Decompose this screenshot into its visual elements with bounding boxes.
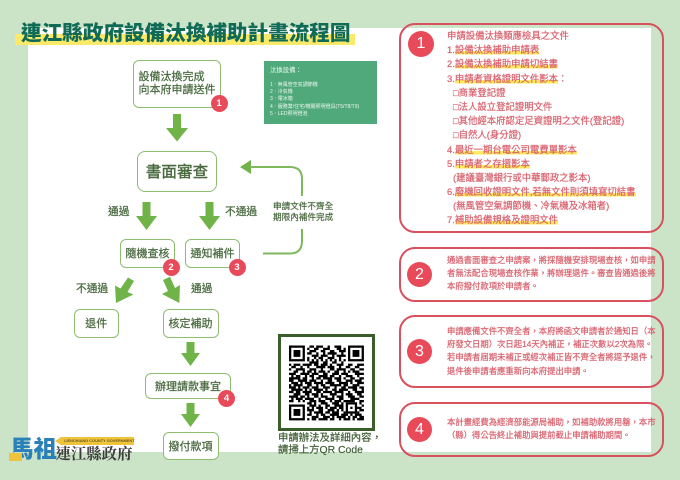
panel 1: required documents [399, 23, 664, 233]
equipment list [270, 82, 359, 117]
documents list: 申請設備汰換類應檢具之文件 [447, 30, 569, 41]
equipment list: 4．服務業/住宅/機關照明燈具(T5/T8/T9) [270, 104, 359, 110]
resubmission text: 府發文日期）次日起14天內補正，補正次數以2次為限。 [447, 339, 653, 349]
resubmission text: 退件後申請者應重新向本府提出申請。 [447, 366, 589, 376]
step: return: 退件 [85, 318, 107, 330]
step: notify: 通知補件 [190, 248, 234, 260]
step: submit application: 向本府申請送件 [138, 84, 216, 96]
logo name: 連江縣政府 [56, 446, 132, 463]
logo yellow accent [9, 453, 22, 461]
title highlight [15, 34, 355, 45]
step: submit application: 設備汰換完成 [138, 71, 204, 83]
documents list: 2.設備汰換補助申請切結書 [447, 58, 558, 69]
documents list: 1.設備汰換補助申請表 [447, 44, 539, 55]
badge 1: 1 [216, 98, 222, 109]
label: resubmit note [273, 201, 333, 222]
resubmission text [447, 326, 656, 376]
step: return [74, 309, 118, 338]
QR code caption: 申請辦法及詳細內容， [278, 433, 382, 444]
badge 2: 2 [168, 262, 174, 272]
panel 3: resubmission note [399, 315, 664, 388]
documents list: □法人設立登記證明文件 [453, 101, 552, 112]
equipment list: 3．電冰箱 [270, 96, 293, 102]
inspection text: 通過書面審查之申請案，將採隨機安排現場查核，如申請 [447, 254, 656, 264]
step: payment [162, 432, 218, 460]
documents list: 5.申請者之存摺影本 [447, 158, 530, 169]
equipment list: 2．冷氣機 [270, 89, 293, 95]
number 4 [407, 417, 432, 442]
resubmission text: 申請應備文件不齊全者，本府將函文申請者於通知日（本 [447, 326, 656, 336]
documents list [447, 30, 636, 225]
step: random inspection [120, 239, 175, 268]
budget text: 本計畫經費為經濟部能源局補助，如補助款將用罄，本市 [447, 416, 656, 426]
badge 3 [228, 258, 246, 276]
documents list: 7.補助設備規格及證明文件 [447, 214, 558, 225]
resubmission text: 若申請者屆期未補正或經次補正皆不齊全者將逕予退件， [447, 352, 656, 362]
label: pass: 通過 [108, 206, 129, 218]
documents list: □自然人(身分證) [453, 129, 521, 140]
step: submit application [133, 60, 221, 108]
badge 2 [162, 258, 180, 276]
step: approve: 核定補助 [168, 318, 212, 330]
step: payment request: 辦理請款事宜 [155, 381, 221, 393]
badge 1 [210, 95, 228, 112]
equipment heading: 汰換設備： [270, 66, 302, 74]
number 2 [407, 262, 432, 287]
QR code frame [278, 334, 375, 431]
step: document review: 書面審查 [146, 164, 208, 181]
step: approve [162, 309, 218, 338]
step: notify [185, 239, 240, 268]
label: resubmit note: 期限內補件完成 [273, 212, 333, 222]
documents list: □商業登記證 [453, 87, 506, 98]
inspection text: 者無法配合現場查核作業，將辦理退件。審查皆通過後將 [447, 268, 656, 278]
panel 2: inspection note [399, 247, 664, 302]
documents list: 6.廢機回收證明文件,若無文件則須填寫切結書 [447, 186, 636, 197]
panel: replacement equipment [264, 60, 377, 124]
inspection text: 本府撥付款項於申請者。 [447, 280, 539, 290]
logo: Lienchiang County Government [9, 436, 135, 463]
label: pass 2: 通過 [191, 283, 212, 295]
step: document review [137, 151, 217, 192]
documents list: 4.最近一期台電公司電費單影本 [447, 144, 577, 155]
documents list: (無風管空氣調節機、冷氣機及冰箱者) [453, 200, 609, 211]
title: 連江縣政府設備汰換補助計畫流程圖 [21, 22, 350, 45]
number 1 [408, 31, 434, 57]
number 3 [407, 339, 432, 364]
budget text [447, 416, 656, 440]
badge 4: 4 [224, 392, 229, 404]
number 1: 1 [417, 35, 425, 52]
number 3: 3 [415, 342, 424, 360]
number 4: 4 [415, 420, 424, 438]
label: fail 2: 不通過 [76, 283, 108, 295]
step: random inspection: 隨機查核 [126, 248, 170, 260]
logo mark: 馬祖 [10, 436, 57, 462]
number 2: 2 [415, 266, 424, 282]
documents list: (建議臺灣銀行或中華郵政之影本) [453, 172, 590, 183]
logo banner text: LIENCHIANG COUNTY GOVERNMENT [64, 438, 135, 443]
QR code caption: 請掃上方QR Code [278, 445, 363, 456]
step: payment request [145, 373, 231, 398]
inspection text [447, 254, 656, 290]
label: resubmit note: 申請文件不齊全 [273, 201, 333, 211]
badge 4 [218, 390, 235, 406]
budget text: （縣）得公告終止補助與提前截止申請補助期間。 [447, 430, 631, 440]
badge 3: 3 [234, 262, 240, 272]
documents list: □其他經本府認定足資證明之文件(登記證) [453, 115, 624, 126]
label: fail: 不通過 [225, 206, 257, 218]
step: payment: 撥付款項 [168, 441, 212, 453]
equipment list: 1．無風管空氣調節機 [270, 82, 318, 88]
logo banner [55, 437, 134, 445]
documents list: 3.申請者資格證明文件影本： [447, 73, 567, 84]
QR code caption [278, 432, 382, 456]
equipment list: 5．LED照明燈泡 [270, 111, 308, 117]
panel 4: budget note [399, 402, 664, 457]
